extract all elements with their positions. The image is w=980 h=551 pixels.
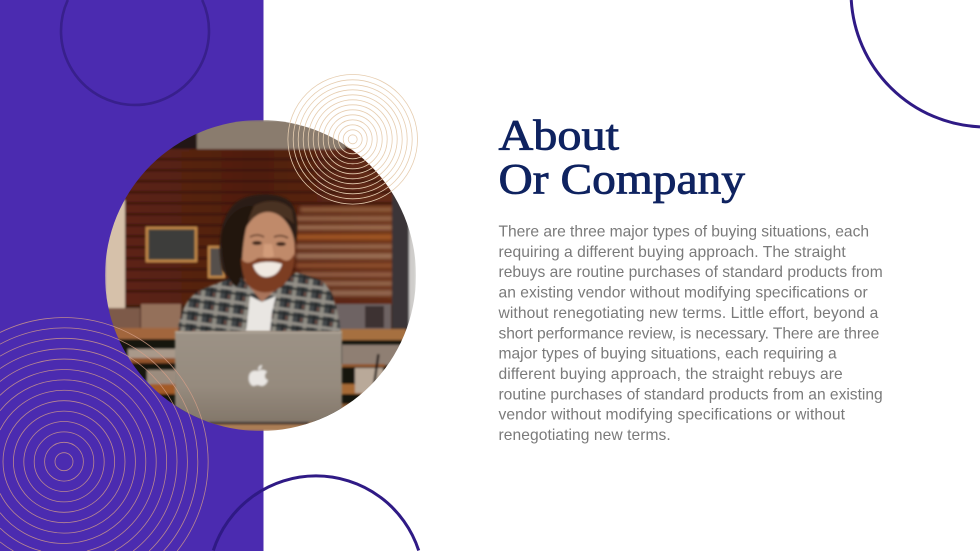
body paragraph: different buying approach, the straight rebuys are (498, 366, 843, 383)
hair back (220, 194, 297, 290)
wood slat wall (125, 149, 393, 305)
white t-shirt (246, 296, 276, 332)
plaid shirt (178, 272, 341, 332)
eyes and brows (250, 235, 288, 246)
body paragraph: routine purchases of standard products from an existing (498, 386, 883, 403)
body paragraph: renegotiating new terms. (498, 427, 671, 444)
beard (241, 254, 294, 292)
body paragraph: major types of buying situations, each requiring a (498, 346, 837, 363)
apple logo (249, 365, 268, 386)
right dark column and pale edge (392, 190, 416, 335)
outline circle: bottom centre (213, 476, 419, 550)
man (178, 194, 341, 332)
glass with straw (355, 354, 383, 393)
heading (498, 112, 746, 203)
heading: Or Company (498, 156, 746, 203)
body paragraph: There are three major types of buying situations, each (498, 224, 869, 240)
picture frame right (209, 247, 224, 277)
outline circle: top left (61, 0, 209, 105)
outline circle: top right (851, 0, 980, 127)
nose (263, 244, 274, 258)
neck (242, 278, 274, 302)
laptop (175, 331, 342, 424)
body paragraph: an existing vendor without modifying specifications or (498, 285, 868, 302)
sofas (108, 304, 391, 330)
picture frame left (147, 228, 196, 261)
photo: man smiling at a laptop in a circle (105, 120, 416, 431)
concentric rings: lower left (0, 318, 208, 551)
ceiling beam (170, 120, 350, 152)
tables and lower room (105, 328, 416, 431)
heading: About (498, 112, 619, 159)
photo background wall (108, 197, 394, 333)
body paragraph: short performance review, is necessary. There are three (498, 325, 879, 342)
panel: purple left band (0, 0, 264, 551)
body paragraph: requiring a different buying approach. The straight (498, 244, 846, 261)
concentric rings: upper right of photo (288, 74, 418, 204)
body paragraph: rebuys are routine purchases of standard products from (498, 264, 883, 281)
body paragraph: without renegotiating new terms. Little effort, beyond a (498, 305, 879, 322)
body paragraph: vendor without modifying specifications or without (498, 407, 846, 424)
face (240, 210, 296, 264)
hair lock left (222, 206, 254, 287)
body paragraph (498, 224, 883, 444)
hair highlight (244, 201, 294, 224)
smile (253, 262, 282, 277)
left pale wall (105, 200, 125, 308)
